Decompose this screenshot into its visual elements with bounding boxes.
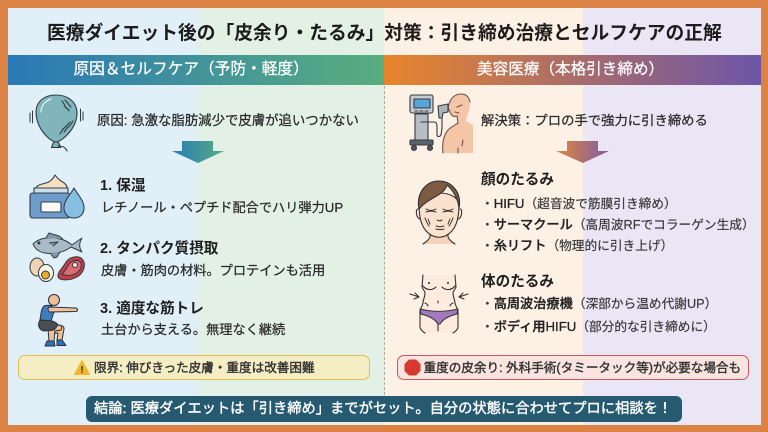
- text: protein: [100, 240, 325, 278]
- heading: body sagging: 体のたるみ: [481, 274, 554, 290]
- text: severe skin: 重度の皮余り: 外科手術(タミータック等)が必要な場合も: [424, 360, 741, 374]
- text: moisturise: [100, 177, 343, 215]
- arrow: right down: [556, 141, 609, 163]
- icon: face: [416, 180, 462, 245]
- conclusion banner: [86, 396, 682, 422]
- description: protein: 皮膚・筋肉の材料。プロテインも活用: [101, 262, 325, 278]
- heading: exercise: 3. 適度な筋トレ: [100, 300, 204, 316]
- heading: causes and self care: 原因＆セルフケア（予防・軽度）: [74, 61, 309, 78]
- text: limit: 限界: 伸びきった皮膚・重度は改善困難: [94, 360, 315, 374]
- description: moisturise: レチノール・ペプチド配合でハリ弾力UP: [101, 200, 343, 215]
- conclusion banner: 結論: 医療ダイエットは「引き締め」までがセット。自分の状態に合わせてプロに相談を！: [94, 401, 672, 417]
- callout: severe skin: [397, 355, 749, 380]
- icon: warning: !: [80, 365, 84, 376]
- list: face treatments: ・サーマクール（高周波RFでコラーゲン生成）: [481, 216, 755, 232]
- heading: medical treatment: 美容医療（本格引き締め）: [477, 61, 664, 78]
- arrow: left down: [172, 141, 224, 163]
- icon: medical machine and patient: [409, 94, 473, 154]
- text: face sagging: [481, 171, 755, 252]
- icon: deflating balloon: [30, 94, 84, 152]
- title: 医療ダイエット後の「皮余り・たるみ」対策：引き締め治療とセルフケアの正解: [47, 22, 722, 42]
- heading: medical treatment: [384, 55, 760, 85]
- icon: stop sign: [404, 360, 420, 376]
- list: body treatments: ・ボディ用HIFU（部分的な引き締めに）: [481, 318, 716, 334]
- icon: cream jar: [29, 174, 85, 218]
- callout: limit: [18, 355, 370, 380]
- icon: fish, eggs and meat: [30, 232, 85, 282]
- text: cause: 原因: 急激な脂肪減少で皮膚が追いつかない: [97, 113, 359, 128]
- icon: warning: [74, 360, 90, 376]
- text: exercise: [100, 300, 285, 336]
- list: face treatments: ・HIFU（超音波で筋膜引き締め）: [481, 196, 677, 210]
- list: body treatments: [481, 296, 717, 334]
- text: solution: 解決策：プロの手で強力に引き締める: [481, 113, 708, 128]
- list: body treatments: ・高周波治療機（深部から温め代謝UP）: [481, 296, 717, 310]
- heading: moisturise: 1. 保湿: [100, 178, 145, 194]
- text: body sagging: [481, 273, 717, 334]
- icon: body: [410, 274, 468, 334]
- description: exercise: 土台から支える。無理なく継続: [101, 322, 285, 336]
- list: face treatments: ・糸リフト（物理的に引き上げ）: [481, 238, 673, 252]
- heading: face sagging: 顔のたるみ: [481, 172, 554, 188]
- heading: protein: 2. タンパク質摂取: [100, 240, 218, 256]
- icon: squat exercise: [38, 294, 78, 346]
- divider: [384, 86, 385, 395]
- heading: causes and self care: [8, 55, 384, 85]
- list: face treatments: [481, 196, 755, 252]
